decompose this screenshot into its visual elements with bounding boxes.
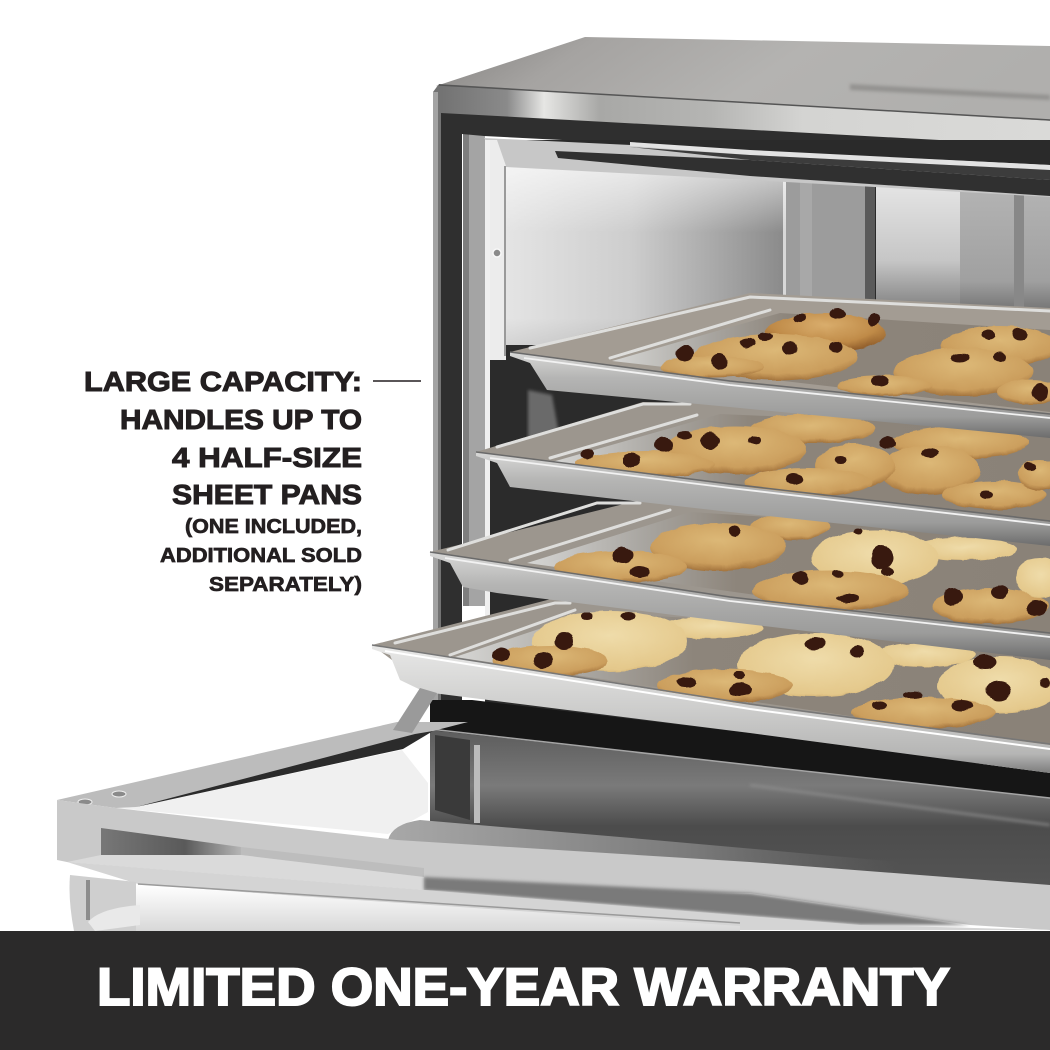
warranty text: LIMITED ONE-YEAR WARRANTY [97, 958, 950, 1017]
pan 3 front rim [430, 552, 1050, 660]
open oven door [57, 695, 1050, 931]
pan 1 front rim [510, 352, 1050, 438]
door glass grey band [388, 820, 900, 880]
door front bar [57, 800, 1050, 930]
oven inner side wall [485, 140, 506, 620]
callout heading text: HANDLES UP TO [120, 404, 362, 435]
callout heading text: 4 HALF-SIZE [172, 442, 362, 473]
callout heading text: SHEET PANS [172, 479, 362, 510]
light area under door [136, 885, 740, 931]
oven top face [436, 37, 1050, 121]
cookies on pan 2 [575, 414, 1050, 509]
door side rail [57, 722, 468, 808]
pan 4 front rim [372, 645, 1050, 773]
oven interior back wall [485, 140, 1050, 770]
door hinge arm [393, 688, 437, 733]
sheet pan 2 with cookies [476, 402, 1050, 546]
cookies on pan 3 [553, 514, 1050, 624]
door white glass reflection [116, 750, 428, 834]
callout heading text: LARGE CAPACITY: [84, 366, 362, 397]
sheet pan 3 with cookies [430, 500, 1050, 660]
callout: large capacity [84, 366, 421, 596]
pan 2 front rim [476, 452, 1050, 546]
door dark glass [430, 695, 1050, 890]
sheet pan 4 with cookies [372, 598, 1050, 773]
warranty banner [0, 931, 1050, 1050]
sheet pan 1 with cookies [510, 293, 1050, 438]
door lower band [67, 862, 1050, 930]
door screws [78, 791, 126, 805]
cookies on pan 4 [492, 611, 1050, 729]
oven front frame [433, 84, 1050, 720]
callout note text: (ONE INCLUDED, [185, 516, 362, 538]
callout heading text [84, 366, 362, 510]
callout note text: SEPARATELY) [209, 574, 362, 596]
callout leader line [373, 380, 421, 382]
dark gap between shelves [490, 345, 1050, 770]
door leg [70, 875, 140, 931]
callout note text [160, 516, 362, 596]
oven inner top rail [484, 138, 1050, 197]
cookies on pan 1 [660, 309, 1050, 404]
callout note text: ADDITIONAL SOLD [160, 545, 362, 567]
oven body [433, 37, 1050, 770]
